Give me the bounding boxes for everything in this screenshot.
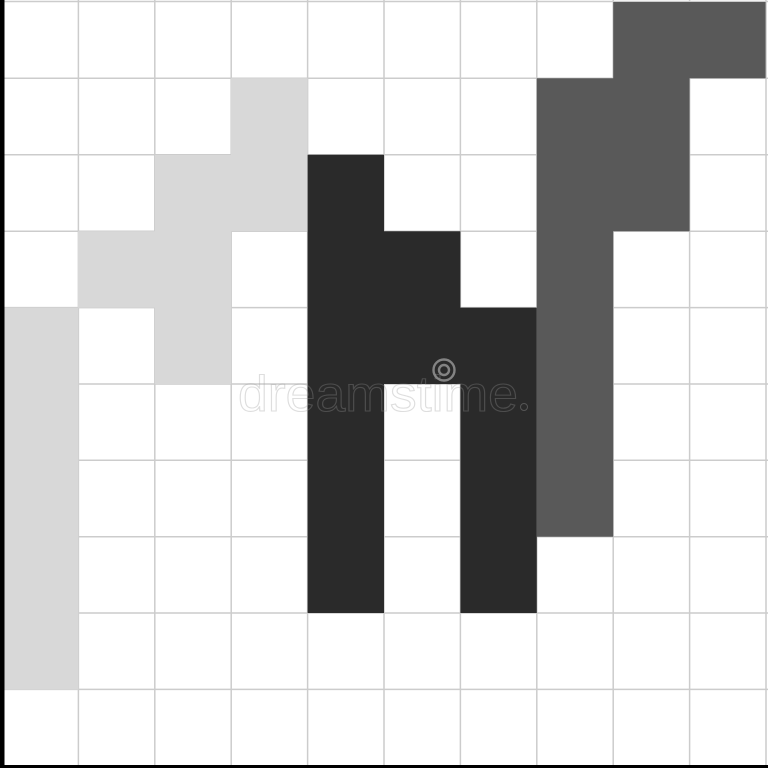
dark series blocks — [308, 155, 537, 613]
vertical axis — [0, 0, 4, 768]
light grey series blocks — [4, 78, 308, 690]
watermark text: dreamstime — [238, 366, 518, 422]
watermark registered mark — [520, 404, 528, 410]
watermark spiral icon — [434, 360, 454, 380]
horizontal axis — [0, 765, 768, 768]
watermark — [238, 360, 528, 422]
medium grey series blocks — [537, 2, 766, 537]
